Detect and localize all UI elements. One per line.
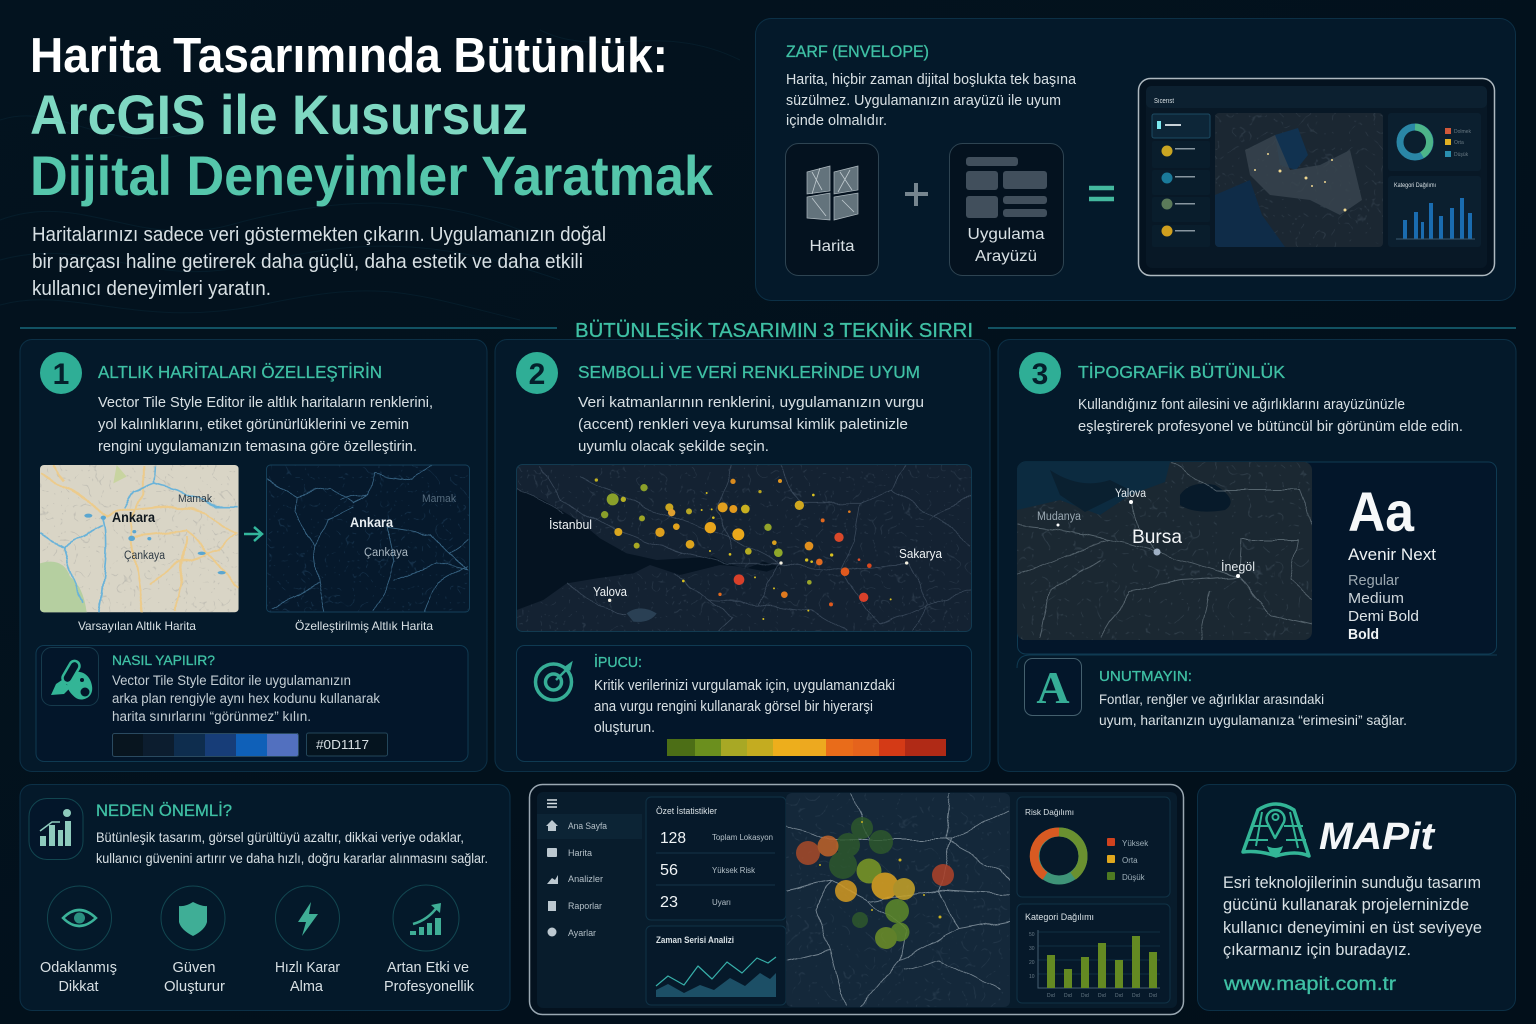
equals sign: [1089, 188, 1114, 199]
number badge 2: 2: [529, 358, 545, 391]
icon: target: [536, 662, 572, 700]
heading: ipucu: İPUCU:: [594, 653, 642, 671]
intro text: bir parçası haline getirerek daha güçlü, daha estetik ve daha etkili: [32, 250, 583, 273]
why text: kullanıcı güvenini artırır ve daha hızlı, doğru kararlar alınmasını sağlar.: [96, 850, 488, 866]
mapit text: kullanıcı deneyimini en üst seviyeye: [1223, 919, 1482, 937]
summary stats: Toplam Lokasyon: [712, 833, 773, 842]
mapit text: gücünü kullanarak projelerninizde: [1223, 896, 1469, 914]
tip text: oluşturun.: [594, 720, 655, 736]
device mockup: Sıcerıst: [1154, 98, 1174, 105]
number badge 2: [516, 352, 558, 394]
category bars: [1017, 904, 1170, 1003]
heading: unutmayın: UNUTMAYIN:: [1099, 668, 1192, 685]
icon: mapit logo: [1243, 804, 1309, 856]
mapit text: [1223, 874, 1482, 959]
mapit text: çıkarmanız için buradayız.: [1223, 941, 1411, 959]
category bars: 50: [1029, 932, 1035, 938]
benefit: artan etki: Profesyonellik: [384, 978, 474, 995]
number badge 1: 1: [53, 358, 69, 391]
callout: ipucu: [516, 646, 972, 762]
font weights: Regular: [1348, 572, 1399, 589]
risk donut: [1017, 797, 1170, 897]
category bars: Dıd: [1064, 993, 1072, 999]
dashboard sidebar: Analizler: [568, 874, 603, 884]
map captions: Özelleştirilmiş Altlık Harita: [295, 619, 433, 633]
risk donut: Yüksek: [1122, 839, 1149, 848]
body 2: uyumlu olacak şekilde seçin.: [578, 438, 769, 455]
device bar panel: Kategori Dağılımı: [1394, 183, 1436, 189]
summary stats: 23: [660, 894, 678, 911]
category bars: 10: [1029, 974, 1035, 980]
category bars: 30: [1029, 946, 1035, 952]
body 3: Kullandığınız font ailesini ve ağırlıklarını arayüzünüzle: [1078, 397, 1405, 413]
title: Dijital Deneyimler Yaratmak: [30, 144, 714, 207]
how-to text: [112, 673, 380, 724]
dashboard mockup: [530, 784, 1184, 1014]
dashboard sidebar: Ayarlar: [568, 928, 596, 938]
custom basemap: [266, 465, 470, 612]
how-to text: arka plan rengiyle aynı hex kodunu kullanarak: [112, 691, 380, 706]
data map: Sakarya: [899, 547, 942, 561]
category bars: Dıd: [1149, 993, 1157, 999]
number badge 1: [40, 352, 82, 394]
how-to text: harita sınırlarını “görünmez” kılın.: [112, 709, 311, 724]
benefit: odaklanmış dikkat: Odaklanmış: [40, 959, 117, 976]
font weights: [1348, 572, 1419, 643]
risk donut: Düşük: [1122, 873, 1146, 882]
icon: letter A: A: [1036, 662, 1070, 713]
summary stats: Uyarı: [712, 898, 731, 907]
body 2: [578, 394, 924, 455]
heading 1: ALTLIK HARİTALARI ÖZELLEŞTİRİN: [98, 362, 382, 382]
summary stats: [646, 797, 786, 920]
device mockup: [1138, 78, 1494, 276]
callout: nasıl yapılır: [36, 646, 468, 762]
bursa map: Mudanya: [1037, 511, 1082, 523]
bursa map: Yalova: [1115, 488, 1147, 500]
body 1: [98, 394, 433, 455]
summary stats: 128: [660, 830, 686, 847]
heading 3: TİPOGRAFİK BÜTÜNLÜK: [1078, 362, 1285, 382]
category bars: Dıd: [1132, 993, 1140, 999]
default basemap: Ankara: [112, 510, 155, 525]
heading: zarf: ZARF (ENVELOPE): [786, 43, 929, 61]
body 2: (accent) renkleri veya kurumsal kimlik paletinizle: [578, 416, 908, 433]
panel: neden önemli: [20, 784, 510, 1010]
tip text: [594, 678, 895, 736]
heading: nasıl yapılır: NASIL YAPILIR?: [112, 652, 215, 668]
card: harita: [786, 144, 878, 276]
default basemap: Çankaya: [124, 550, 166, 562]
plus sign: [905, 183, 928, 206]
why text: [96, 829, 488, 866]
device donut panel: Orta: [1454, 140, 1464, 146]
category bars: Dıd: [1047, 993, 1055, 999]
font name: Avenir Next: [1348, 545, 1436, 564]
why text: Bütünleşik tasarım, görsel gürültüyü azaltır, dikkai veriye odaklar,: [96, 829, 464, 845]
body 2: Veri katmanlarının renklerini, uygulamanızın vurgu: [578, 394, 924, 411]
map captions: [78, 619, 433, 633]
zarf description: Harita, hiçbir zaman dijital boşlukta tek başına: [786, 72, 1077, 88]
reminder text: [1099, 691, 1407, 728]
map captions: Varsayılan Altlık Harita: [78, 619, 196, 633]
colour ramp: [667, 739, 946, 756]
font weights: Demi Bold: [1348, 608, 1419, 625]
risk donut: Risk Dağılımı: [1025, 807, 1074, 817]
panel 2: sembolloji ve renkler: [495, 340, 990, 772]
dashboard sidebar: Raporlar: [568, 901, 602, 911]
how-to text: Vector Tile Style Editor ile uygulamanızın: [112, 673, 351, 688]
benefit: artan etki: [384, 885, 474, 995]
card: uygulama arayüzü: [950, 144, 1064, 276]
reminder text: Fontlar, renğler ve ağırlıklar arasındaki: [1099, 691, 1324, 707]
intro text: [32, 223, 606, 300]
website: www.mapit.com.tr: [1223, 973, 1397, 995]
card: uygulama arayüzü: Arayüzü: [975, 248, 1037, 265]
intro text: kullanıcı deneyimleri yaratın.: [32, 277, 271, 300]
heading 2: SEMBOLLİ VE VERİ RENKLERİNDE UYUM: [578, 362, 920, 382]
tip text: ana vurgu rengini kullanarak görsel bir hiyerarşi: [594, 699, 873, 715]
benefit: artan etki: Artan Etki ve: [387, 959, 469, 976]
title: ArcGIS ile Kusursuz: [30, 83, 528, 146]
benefit: hızlı karar alma: [275, 886, 340, 995]
hex code: #0D1117: [316, 738, 369, 752]
device map: [1215, 113, 1383, 247]
mapit wordmark: MAPit: [1319, 816, 1435, 858]
summary stats: Yüksek Risk: [712, 866, 756, 875]
risk donut: Orta: [1122, 856, 1138, 865]
zarf description: içinde olmalıdır.: [786, 113, 887, 129]
device donut panel: Dolmek: [1454, 129, 1471, 135]
default basemap: [40, 465, 239, 612]
intro text: Haritalarınızı sadece veri göstermekten çıkarın. Uygulamanızın doğal: [32, 223, 606, 246]
callout: unutmayın: [1017, 655, 1497, 728]
dashboard sidebar: Harita: [568, 848, 592, 858]
tip text: Kritik verilerinizi vurgulamak için, uygulamanızdaki: [594, 678, 895, 694]
device donut panel: [1388, 113, 1481, 171]
device bar panel: [1388, 176, 1481, 247]
benefit: güven oluşturur: Güven: [172, 959, 216, 976]
body 3: eşleştirerek profesyonel ve bütüncül bir görünüm elde edin.: [1078, 419, 1463, 435]
type card: [1017, 462, 1496, 654]
custom basemap: Çankaya: [364, 547, 409, 559]
zarf description: süzülmez. Uygulamanızın arayüzü ile uyum: [786, 93, 1061, 109]
summary stats: 56: [660, 862, 678, 879]
heading: neden önemli: NEDEN ÖNEMLİ?: [96, 801, 232, 820]
time series: Zaman Serisi Analizi: [656, 935, 734, 945]
card: uygulama arayüzü: Uygulama: [968, 226, 1045, 243]
icon: letter A: [1024, 658, 1082, 716]
icon: chart: [29, 798, 83, 860]
hex code: [306, 733, 388, 756]
data map: İstanbul: [549, 518, 592, 532]
colour swatches: [112, 733, 298, 756]
body 1: Vector Tile Style Editor ile altlık haritaların renklerini,: [98, 394, 433, 411]
category bars: Dıd: [1081, 993, 1089, 999]
title: Harita Tasarımında Bütünlük:: [30, 29, 668, 83]
device sidebar: [1152, 114, 1210, 247]
device donut panel: Düşük: [1454, 152, 1469, 158]
time series: [646, 926, 786, 1005]
dashboard sidebar: Ana Sayfa: [568, 821, 607, 831]
category bars: 20: [1029, 960, 1035, 966]
custom basemap: Mamak: [422, 493, 456, 505]
number badge 3: [1019, 352, 1061, 394]
mapit text: Esri teknolojilerinin sunduğu tasarım: [1223, 874, 1481, 892]
panel 1: altlık haritalar: [20, 340, 487, 772]
body 1: rengini uygulamanızın temasına göre özelleştirin.: [98, 438, 417, 455]
reminder text: uyum, haritanızın uygulamanıza “erimesini” sağlar.: [1099, 712, 1407, 728]
section heading: BÜTÜNLEŞİK TASARIMIN 3 TEKNİK SIRRI: [575, 319, 973, 342]
dashboard map: [786, 793, 1010, 1007]
data map: [516, 464, 972, 632]
data map: Yalova: [593, 585, 627, 599]
arrow: [244, 527, 262, 541]
zarf description: [786, 72, 1077, 129]
panel: zarf (envelope): [756, 18, 1516, 300]
benefit: odaklanmış dikkat: Dikkat: [58, 978, 99, 995]
bursa map: İnegöl: [1221, 559, 1255, 574]
bursa map: Bursa: [1132, 526, 1182, 548]
category bars: Dıd: [1115, 993, 1123, 999]
bursa map: [1017, 462, 1312, 640]
number badge 3: 3: [1032, 358, 1048, 391]
body 1: yol kalınlıklarını, etiket görünürlüklerini ve zemin: [98, 416, 409, 433]
font specimen Aa: Aa: [1348, 480, 1415, 543]
font weights: Bold: [1348, 626, 1379, 643]
category bars: Dıd: [1098, 993, 1106, 999]
category bars: Kategori Dağılımı: [1025, 912, 1094, 922]
benefit: hızlı karar alma: Hızlı Karar: [275, 959, 340, 976]
dashboard sidebar: [537, 800, 642, 938]
benefit: odaklanmış dikkat: [40, 886, 117, 995]
card: harita: Harita: [810, 238, 855, 255]
summary stats: Özet İstatistikler: [656, 806, 717, 816]
body 3: [1078, 397, 1463, 435]
panel: mapit: [1198, 784, 1516, 1010]
benefit: güven oluşturur: Oluşturur: [164, 978, 225, 995]
benefit: güven oluşturur: [161, 886, 225, 995]
font weights: Medium: [1348, 590, 1404, 607]
panel 3: tipografi: [998, 340, 1516, 772]
custom basemap: Ankara: [350, 515, 393, 530]
title: [30, 29, 714, 207]
default basemap: Mamak: [178, 493, 212, 505]
icon: brush and palette: [42, 648, 98, 706]
benefit: hızlı karar alma: Alma: [290, 978, 324, 995]
